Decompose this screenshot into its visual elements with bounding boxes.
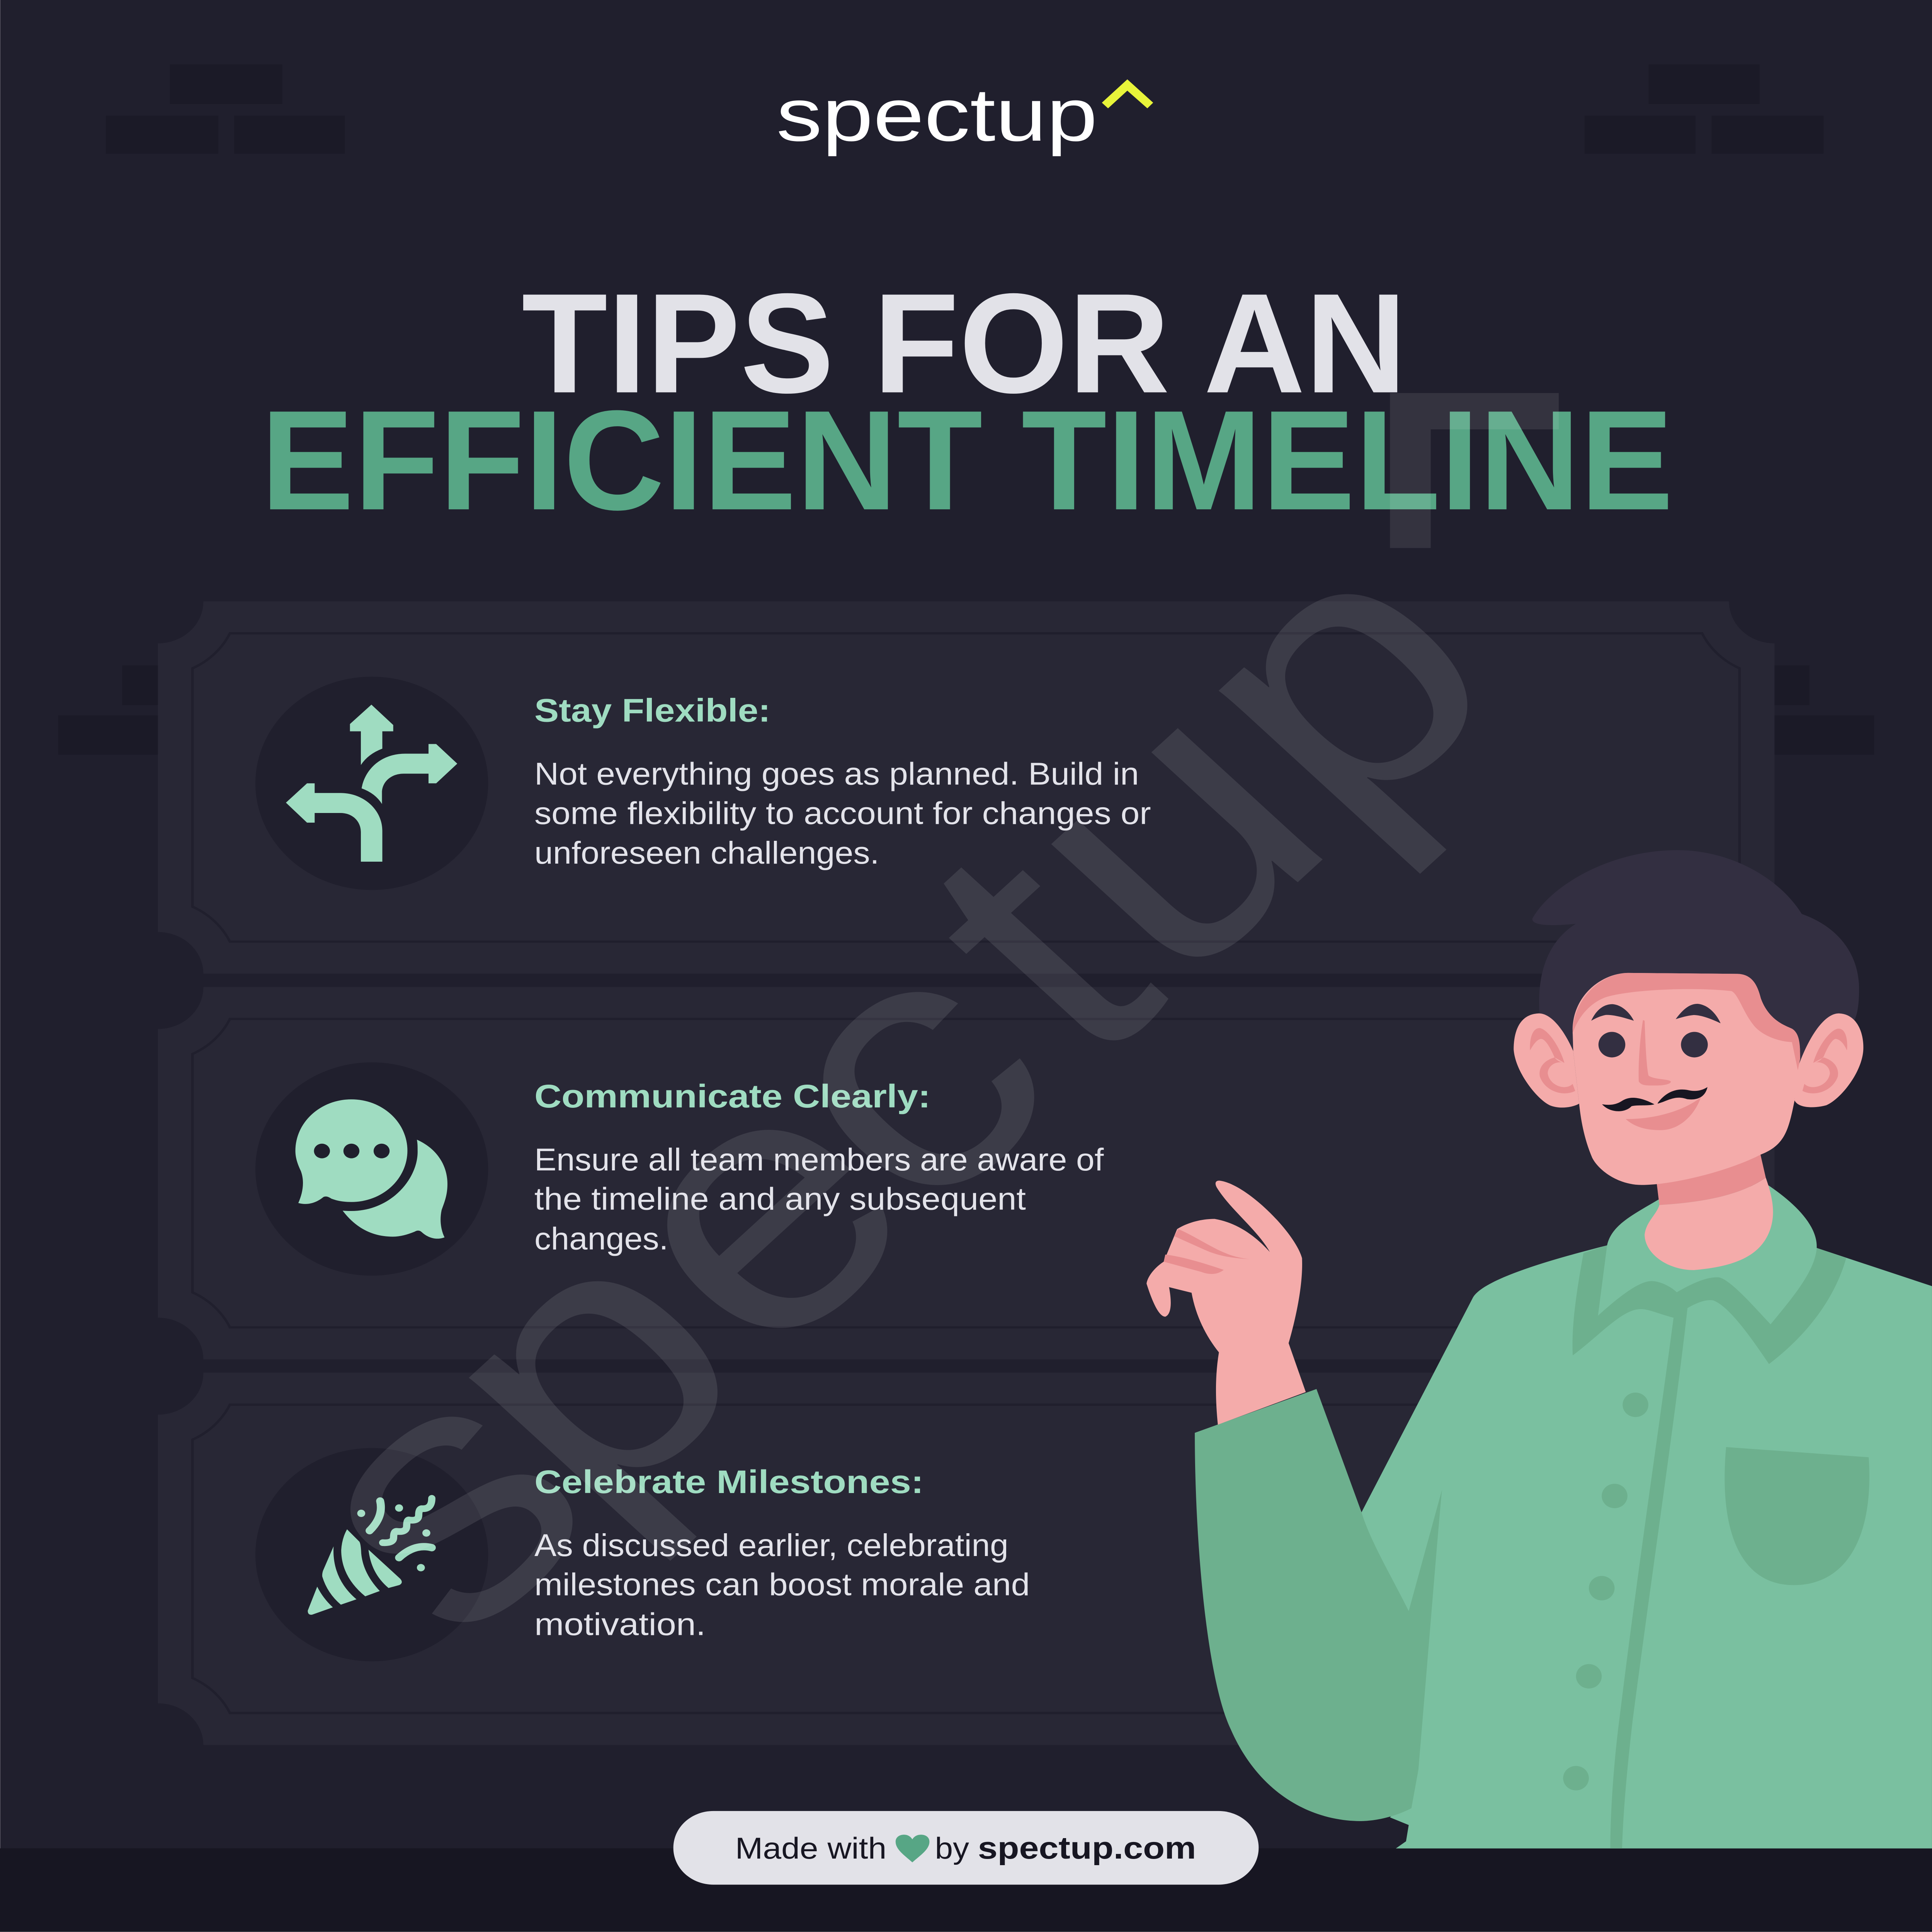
icon: chat bubbles [255, 1062, 488, 1276]
decorative watermark fragment over title [1390, 393, 1559, 548]
left ear [1514, 1014, 1579, 1107]
icon: party popper [255, 1448, 488, 1662]
panel: communicate clearly [158, 987, 1774, 1359]
icon: diverging arrows [255, 677, 488, 890]
text: communicate clearly body: changes. [534, 1221, 668, 1256]
footer band [0, 1848, 1932, 1932]
hair [1532, 850, 1859, 1072]
logo: spectup [776, 73, 1097, 157]
finger creases [1164, 1229, 1250, 1274]
sleeve [1195, 1389, 1442, 1821]
text: celebrate milestones body: motivation. [534, 1607, 706, 1642]
shirt [1146, 1181, 1932, 1849]
character: man pointing [1146, 850, 1932, 1849]
icon: heart [896, 1835, 929, 1862]
text: spectup.com: spectup.com [978, 1830, 1196, 1865]
heading: stay flexible: Stay Flexible: [534, 692, 770, 729]
text: communicate clearly body: Ensure all team members are aware of [534, 1142, 1104, 1177]
heading: celebrate milestones: Celebrate Milestones: [534, 1463, 923, 1500]
text: celebrate milestones body [534, 1527, 1030, 1642]
forehead shade [1573, 973, 1800, 1070]
pocket [1725, 1447, 1869, 1585]
nose [1639, 1020, 1671, 1085]
text: stay flexible body: Not everything goes as planned. Build in [534, 756, 1139, 792]
buttons [1563, 1393, 1648, 1790]
icon: logo chevron [1102, 79, 1153, 108]
text: stay flexible body [534, 756, 1151, 871]
text: by: by [935, 1832, 969, 1865]
title [261, 264, 1673, 539]
text: stay flexible body: some flexibility to account for changes or [534, 796, 1151, 831]
neck [1657, 1155, 1766, 1205]
right ear [1794, 1014, 1863, 1107]
background bricks [58, 64, 1874, 755]
face [1573, 973, 1800, 1185]
text: celebrate milestones body: milestones can boost morale and [534, 1567, 1030, 1602]
text: celebrate milestones body: As discussed earlier, celebrating [534, 1527, 1009, 1563]
mouth [1626, 1097, 1701, 1130]
text: communicate clearly body [534, 1142, 1104, 1256]
head [1514, 850, 1863, 1270]
text: communicate clearly body: the timeline and any subsequent [534, 1181, 1026, 1217]
placket [1610, 1308, 1687, 1849]
title: EFFICIENT TIMELINE [261, 381, 1673, 539]
text: stay flexible body: unforeseen challenges. [534, 835, 879, 871]
eyebrows [1591, 1004, 1721, 1023]
panel: celebrate milestones [158, 1372, 1774, 1745]
hand [1146, 1181, 1306, 1425]
heading: communicate clearly: Communicate Clearly: [534, 1078, 930, 1114]
text: made with: Made with [735, 1832, 886, 1865]
collar shade [1573, 1245, 1846, 1364]
moustache [1602, 1087, 1708, 1111]
footer pill [673, 1811, 1259, 1885]
watermark: spectup [211, 462, 1570, 1707]
title: TIPS FOR AN [522, 264, 1407, 423]
eyes [1599, 1032, 1708, 1058]
panel: stay flexible [158, 601, 1774, 974]
